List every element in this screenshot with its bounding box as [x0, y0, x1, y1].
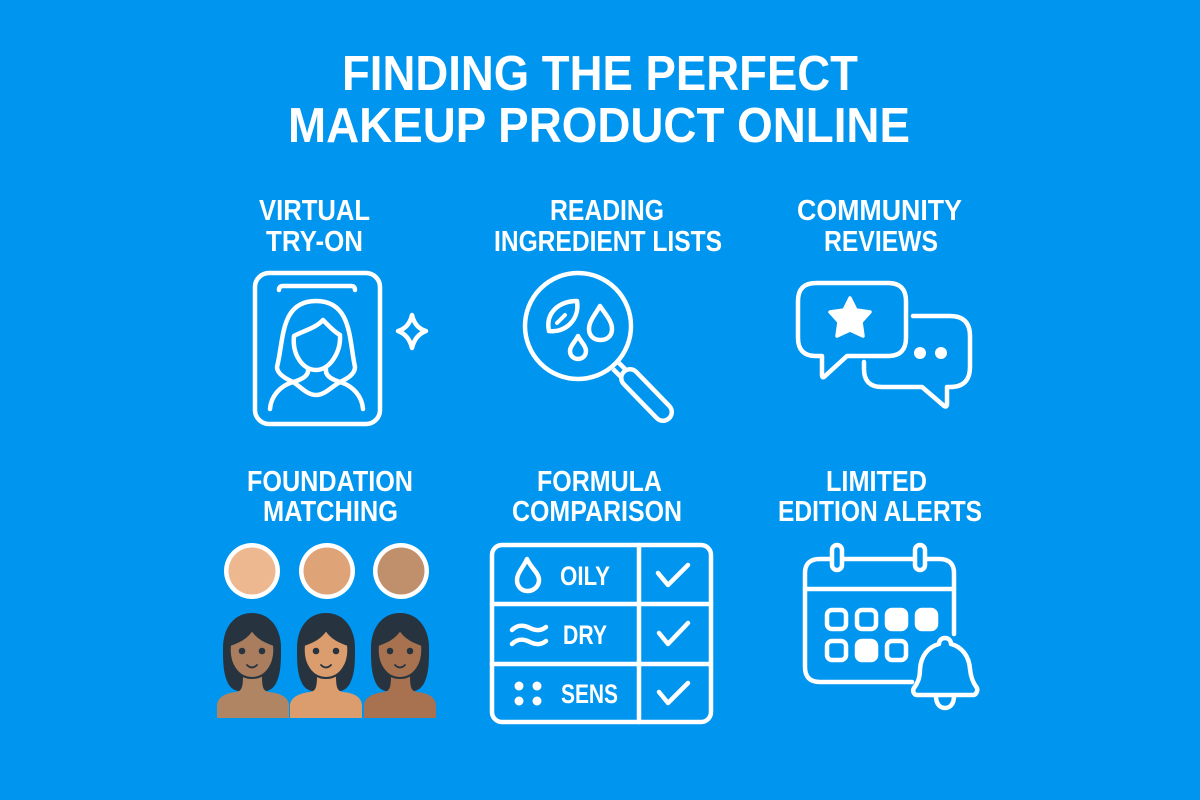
row: dry: DRY: [563, 620, 607, 650]
heading: reading ingredient lists: INGREDIENT LISTS: [494, 226, 722, 258]
heading: formula comparison: [512, 466, 682, 528]
icon: person with medium tone: [290, 613, 362, 718]
row: oily: OILY: [560, 561, 610, 591]
heading: virtual try-on: TRY-ON: [266, 226, 363, 258]
title: FINDING THE PERFECT: [342, 47, 858, 101]
icon: speech bubbles with star: [798, 283, 970, 406]
icon: person with deep tone: [364, 613, 436, 718]
title: MAKEUP PRODUCT ONLINE: [288, 99, 910, 153]
heading: community reviews: REVIEWS: [824, 226, 938, 258]
row: oily: [517, 559, 688, 591]
heading: reading ingredient lists: READING: [550, 195, 664, 227]
title: [288, 47, 910, 153]
heading: virtual try-on: VIRTUAL: [259, 195, 370, 227]
heading: limited edition alerts: EDITION ALERTS: [778, 496, 982, 528]
heading: foundation matching: FOUNDATION: [247, 466, 413, 498]
chart: formula comparison table: [492, 545, 711, 722]
icon: magnifier with leaf and drops: [525, 273, 663, 412]
icon: person with light-medium tone: [217, 613, 289, 718]
row: dry: [512, 620, 688, 650]
heading: limited edition alerts: LIMITED: [826, 466, 927, 498]
row: sens: [514, 679, 688, 709]
heading: foundation matching: MATCHING: [263, 496, 398, 528]
row: sens: SENS: [561, 679, 618, 709]
heading: formula comparison: FORMULA: [537, 466, 662, 498]
heading: limited edition alerts: [778, 466, 982, 528]
heading: virtual try-on: [259, 195, 370, 258]
heading: formula comparison: COMPARISON: [512, 496, 682, 528]
heading: community reviews: [797, 195, 962, 258]
heading: foundation matching: [247, 466, 413, 528]
heading: reading ingredient lists: [494, 195, 722, 258]
icon: calendar with bell: [805, 545, 977, 708]
icon: foundation swatches: [224, 543, 429, 599]
heading: community reviews: COMMUNITY: [797, 195, 962, 227]
icon: portrait frame with sparkle: [255, 273, 426, 424]
